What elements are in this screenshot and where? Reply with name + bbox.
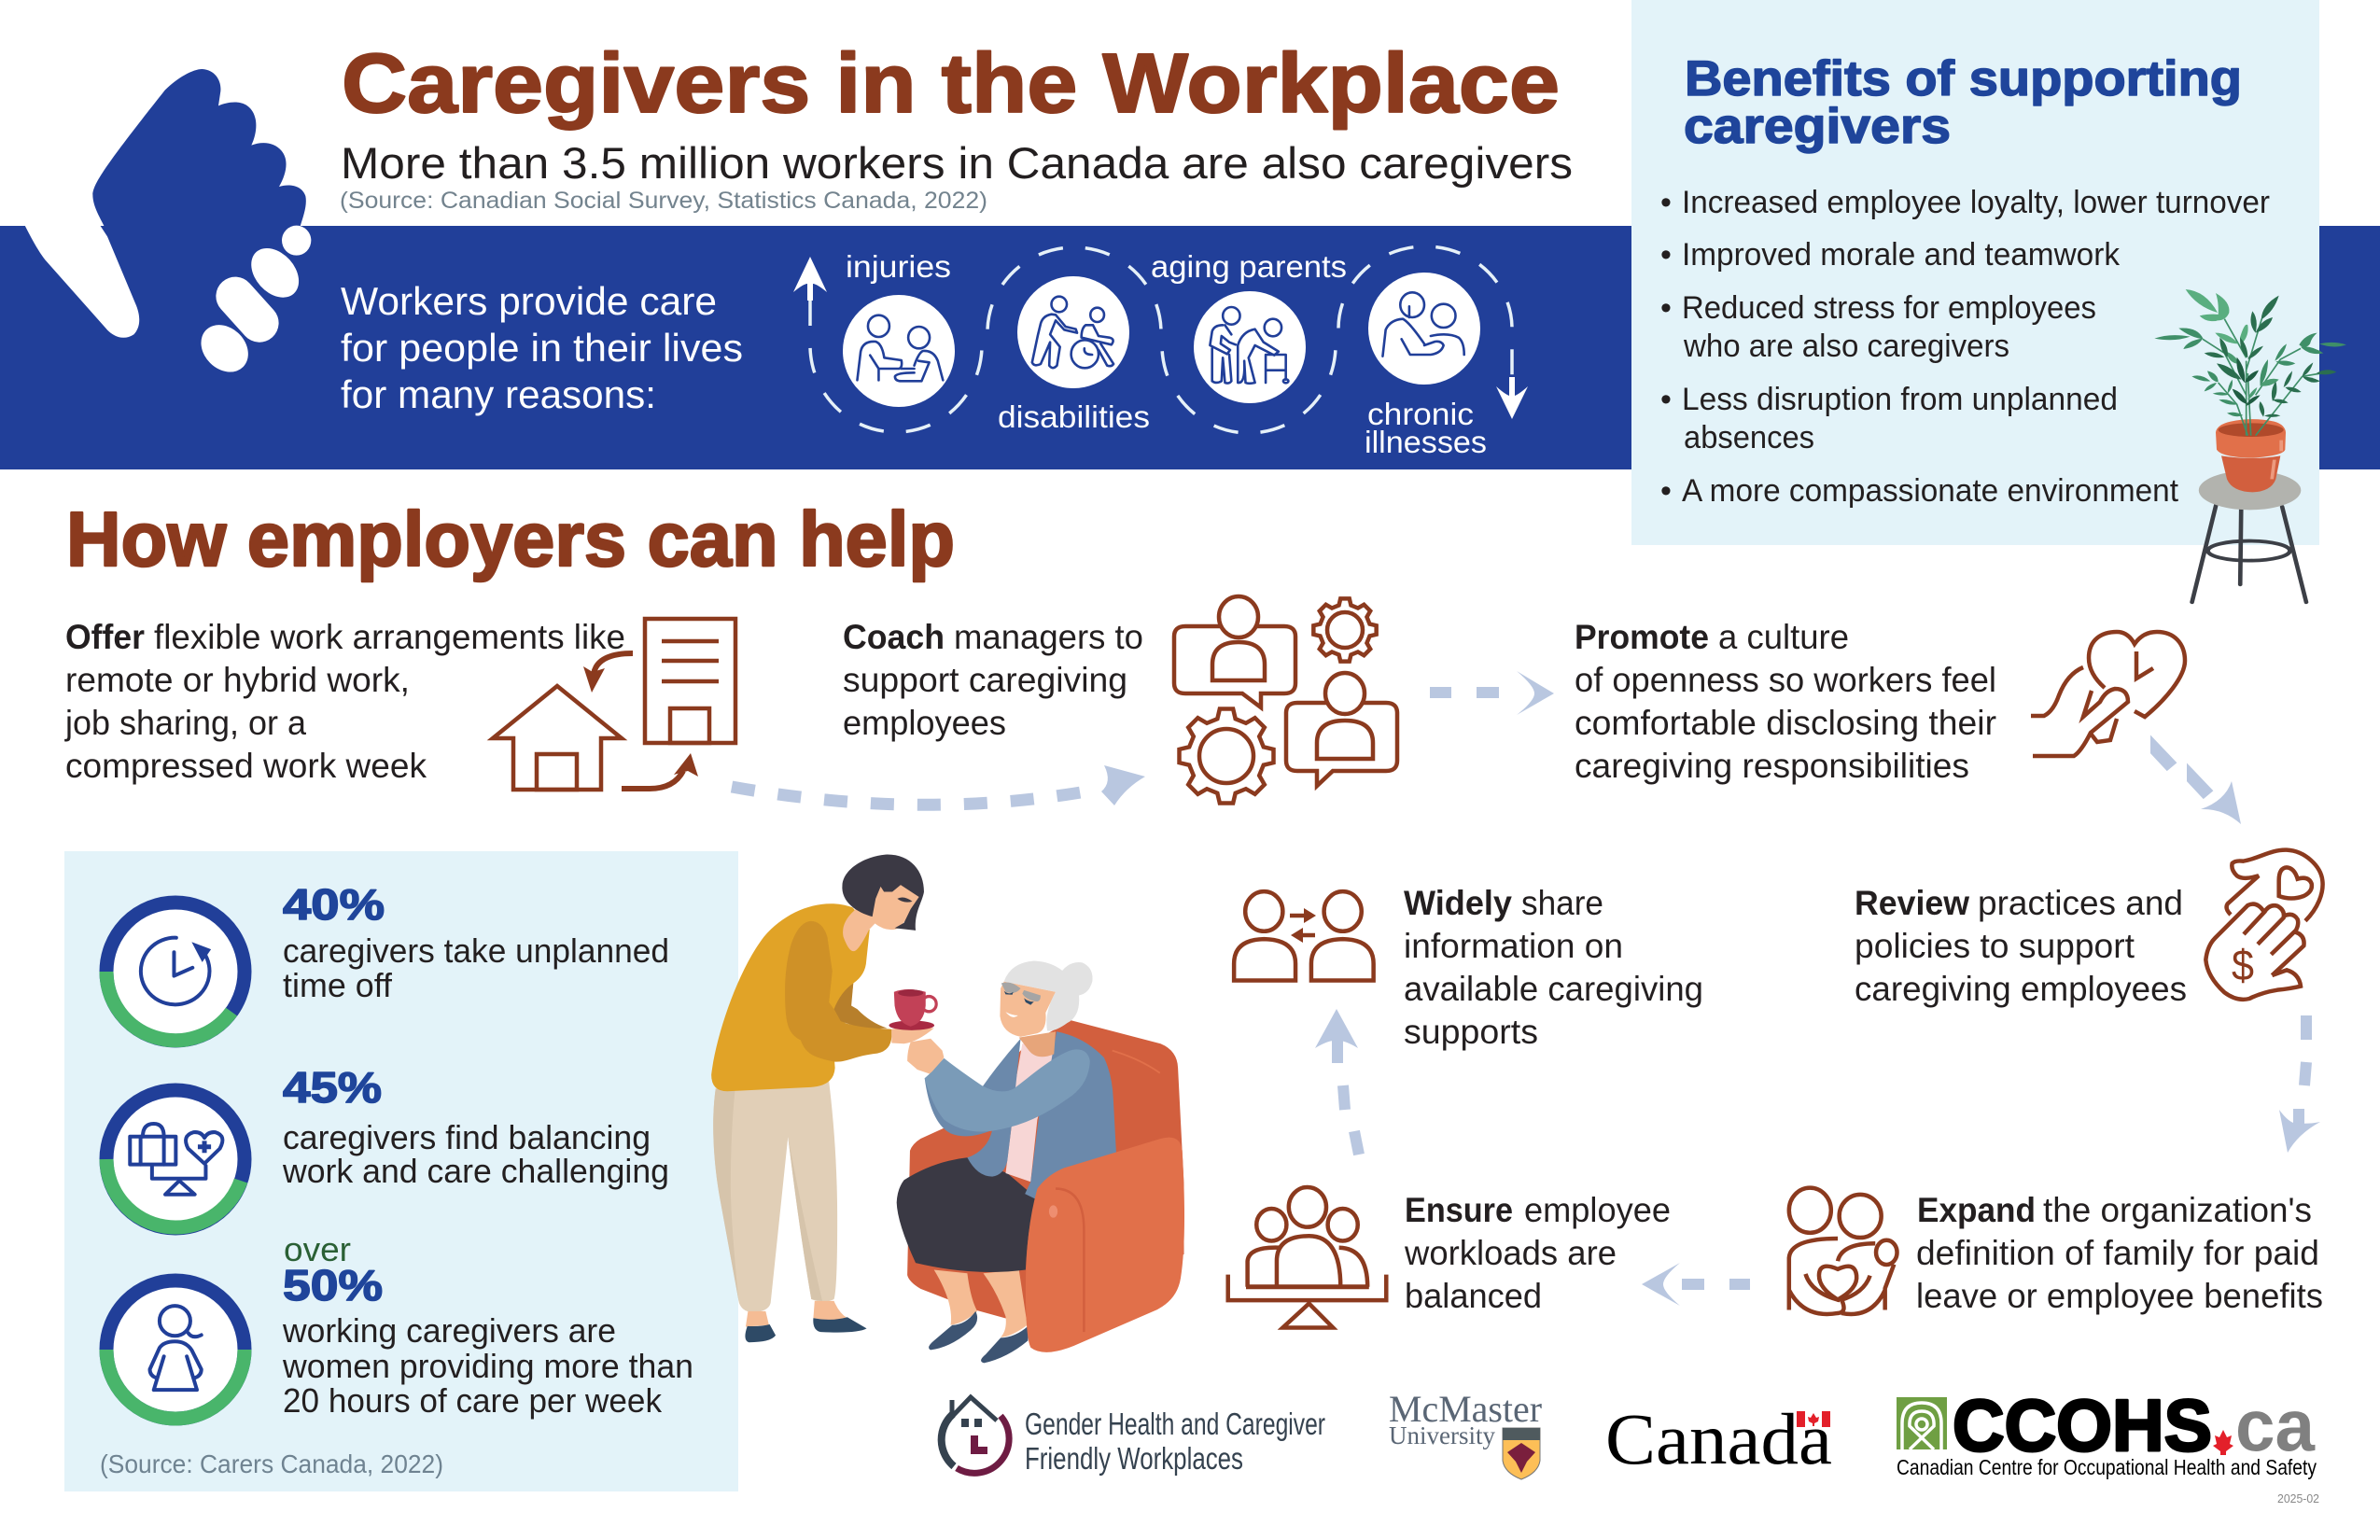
reason: chronic illnesses: chronic [1367,397,1474,431]
benefits list: • [1660,473,1672,509]
stat: over 50%: women providing more than [282,1347,693,1385]
stat: over 50%: over [284,1230,351,1268]
heading: benefits [1684,51,2242,154]
icon: home and office [493,619,735,790]
heading: benefits: Benefits of supporting [1685,51,2242,106]
logo: McMaster University: University [1389,1421,1495,1449]
subtitle: More than 3.5 million workers in Canada are also caregivers [341,138,1573,188]
panel: benefits of supporting caregivers [1631,0,2319,545]
benefits list: Increased employee loyalty, lower turnover [1682,185,2270,220]
logo: gender health and caregiver friendly workplaces: Gender Health and Caregiver [1025,1407,1325,1441]
step: offer: remote or hybrid work, [65,661,410,699]
step: review [1855,884,2187,1008]
step: promote: Promote [1575,618,1709,656]
stat: 40%: 40% [283,880,385,929]
logo: McMaster University [1389,1388,1542,1479]
step: review: Review [1855,884,1969,922]
benefits list: Improved morale and teamwork [1682,237,2121,273]
reason: disabilities: disabilities [998,399,1150,434]
stat: over 50%: working caregivers are [282,1311,616,1350]
step: review: policies to support [1855,927,2135,965]
date code: 2025-02 [2277,1491,2319,1505]
step: promote: caregiving responsibilities [1575,747,1969,785]
illustration: potted plant on stool [2154,289,2346,602]
seated woman's legs [934,1270,1028,1337]
step: ensure [1404,1191,1671,1315]
icon: clasped hands logo [25,69,311,382]
step: promote: a culture [1718,618,1849,656]
source note: (Source: Canadian Social Survey, Statistics Canada, 2022) [340,188,987,214]
caregiver hair [842,855,924,931]
eyebrows and eyes [1001,982,1041,1001]
caregiver ankles and shoes [746,1301,847,1327]
reason: injuries [843,249,955,407]
step: offer: compressed work week [65,747,427,785]
step: coach: Coach [843,618,945,656]
stat: 45%: 45% [283,1063,382,1112]
caregiver sweater [711,903,870,1091]
step: expand: Expand [1917,1191,2036,1229]
step: widely: share [1521,884,1603,922]
step: promote [1575,618,1996,785]
stat: over 50%: 20 hours of care per week [283,1381,663,1420]
logo: CCOHS: CCOHS [1953,1384,2212,1466]
reaching hand [907,1039,944,1075]
caregiver trousers [713,1082,837,1312]
icon: hands giving heart and money [2205,850,2323,1000]
arrow: ensure to widely [1315,1009,1359,1155]
benefits list: A more compassionate environment [1682,473,2179,509]
step: expand: leave or employee benefits [1916,1277,2323,1315]
icon: hand with heart clock [2031,632,2185,756]
logo: gender health and caregiver friendly workplaces: Friendly Workplaces [1025,1441,1243,1476]
benefits list: • [1660,237,1672,273]
step: ensure: employee [1524,1191,1671,1229]
benefits list: absences [1684,420,1814,455]
benefits list [1660,185,2270,509]
armchair back [907,1020,1184,1323]
skirt [897,1157,1036,1272]
step: coach: employees [843,704,1006,742]
logo: gender health and caregiver friendly workplaces [942,1397,1325,1476]
step: offer: Offer [65,618,145,656]
title: Caregivers in the Workplace [342,37,1560,131]
step: ensure: workloads are [1404,1234,1617,1272]
reason: chronic illnesses: illnesses [1365,425,1487,459]
step: review: practices and [1978,884,2183,922]
step: widely [1404,884,1703,1051]
stat: 45%: work and care challenging [282,1152,669,1190]
stat: 45% [106,1063,669,1228]
cardigan [925,1031,1116,1199]
shirt [1005,1043,1056,1182]
caregiver neck and face [843,885,877,951]
reason: aging parents [1151,249,1347,403]
banner text: reasons: Workers provide care [341,279,717,323]
arrow: coach to promote [1430,671,1554,715]
logo: Canada wordmark: Canada [1605,1398,1832,1479]
step: promote: comfortable disclosing their [1575,704,1996,742]
step: widely: information on [1404,927,1623,965]
step: expand: definition of family for paid [1916,1234,2319,1272]
white hair [1004,960,1093,1031]
neck and head [1019,1031,1056,1057]
stat: over 50%: 50% [283,1261,383,1309]
arrow: review to expand [2279,1015,2320,1153]
icon: family with heart [1789,1188,1897,1314]
step: coach: support caregiving [843,661,1127,699]
icon: managers with gears [1174,596,1397,803]
heading: benefits: caregivers [1684,99,1951,154]
step: expand: the organization's [2043,1191,2312,1229]
stat: 40%: time off [283,966,393,1004]
panel: caregiver statistics [64,851,738,1491]
step: ensure: balanced [1405,1277,1542,1315]
step: offer [64,618,625,785]
dashed serpentine path with arrows [793,246,1528,433]
caregiver hand [891,1027,934,1043]
illustration: caregiver serving tea to older woman [711,855,1184,1363]
banner text: reasons: for people in their lives [341,326,743,370]
stat: 40% [106,880,669,1041]
banner text: reasons [341,279,743,416]
benefits list: Less disruption from unplanned [1682,382,2118,417]
step: widely: available caregiving [1404,970,1703,1008]
step: offer: flexible work arrangements like [154,618,625,656]
benefits list: • [1660,185,1672,220]
source note: (Source: Carers Canada, 2022) [100,1449,443,1478]
arrow: expand to ensure [1642,1263,1750,1306]
benefits list: • [1660,290,1672,326]
armchair arm [1026,1138,1184,1352]
reason: disabilities [998,276,1150,434]
step: promote: of openness so workers feel [1575,661,1996,699]
step: coach [843,618,1143,742]
stat: 45%: caregivers find balancing [283,1118,651,1156]
benefits list: Reduced stress for employees [1682,290,2096,326]
reason: chronic illnesses [1365,273,1487,459]
icon: two people sharing information [1234,891,1374,981]
stat: over 50% [106,1230,693,1420]
step: offer: job sharing, or a [64,704,306,742]
step: coach: managers to [954,618,1143,656]
benefits list: who are also caregivers [1683,329,2009,364]
step: ensure: Ensure [1405,1191,1513,1229]
step: widely: Widely [1404,884,1512,922]
cardigan sleeve [925,1049,1090,1131]
banner text: reasons: for many reasons: [341,372,656,416]
icon: hands giving heart and money: $ [2232,941,2254,989]
reason: injuries: injuries [846,249,951,284]
blue banner [0,226,2380,469]
step: review: caregiving employees [1855,970,2187,1008]
arrow: promote to review [2153,742,2241,824]
logo: CCOHS [1897,1384,2317,1479]
arrow: offer to coach [732,765,1145,805]
icon: balanced team on scale [1228,1187,1386,1327]
logo: McMaster University: McMaster [1389,1388,1542,1430]
teacup and saucer [889,1020,934,1030]
logo: CCOHS: ca [2235,1384,2316,1466]
heading: how employers can help: How employers can help [66,496,955,582]
stat: 40%: caregivers take unplanned [283,931,669,970]
benefits list: • [1660,382,1672,417]
step: widely: supports [1404,1013,1538,1051]
step: expand [1916,1191,2323,1315]
reason: aging parents: aging parents [1151,249,1347,284]
